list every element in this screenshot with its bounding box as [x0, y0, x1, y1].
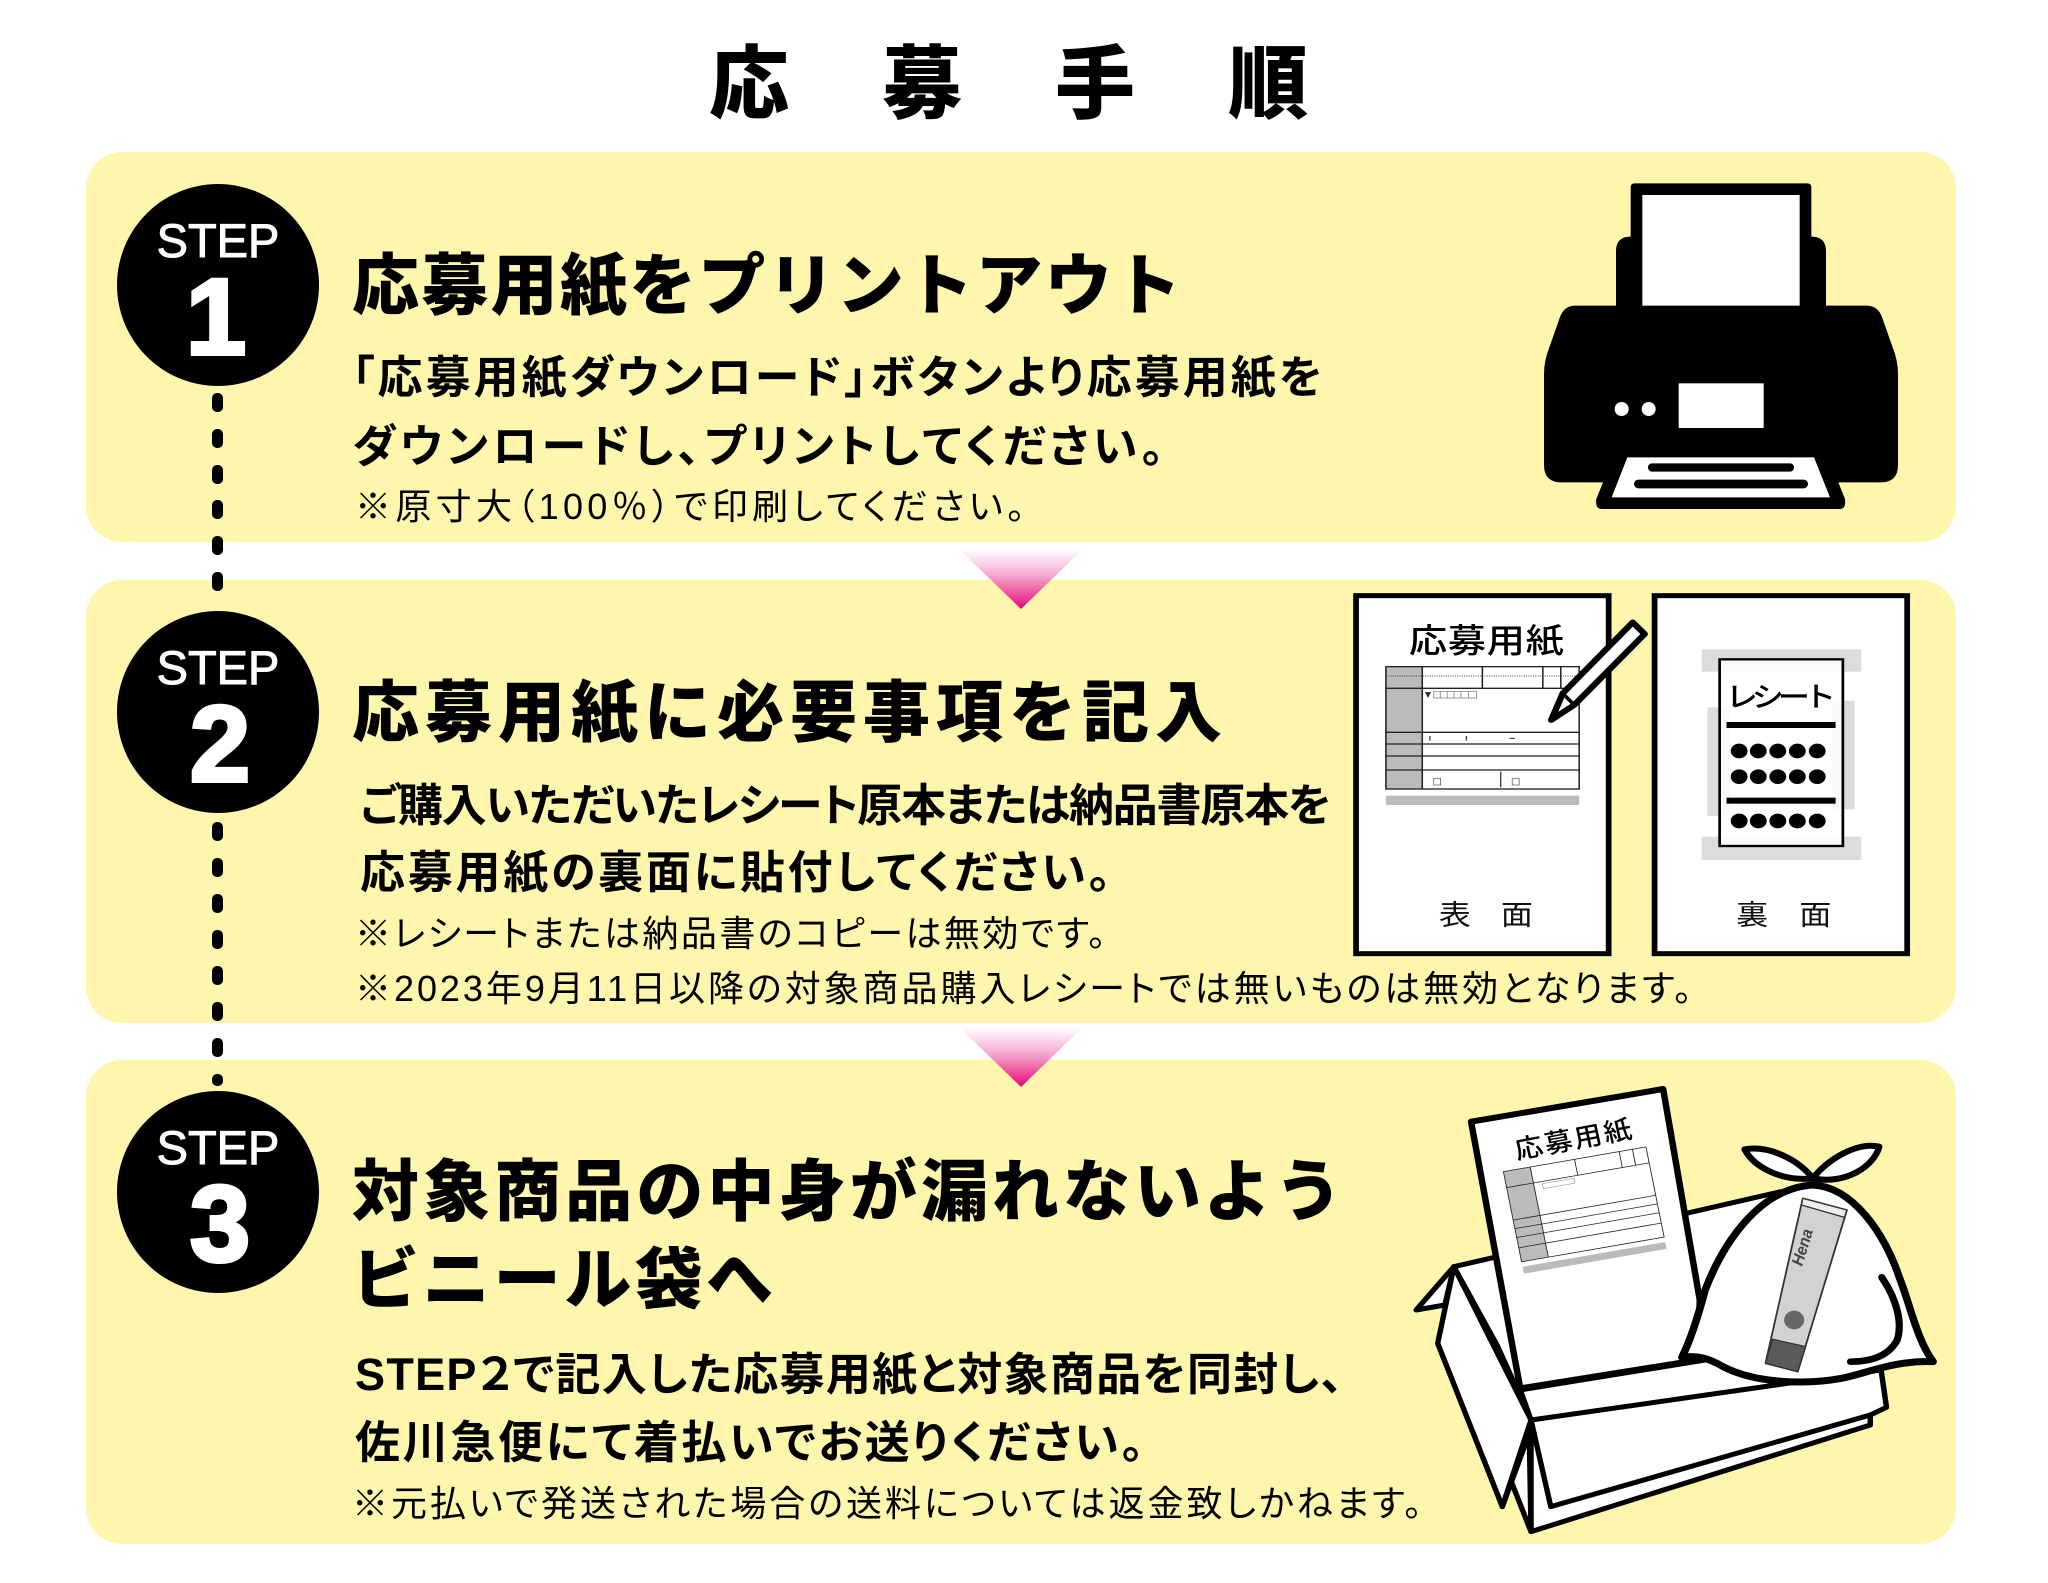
text block: step 3 instructions: 佐川急便にて着払いでお送りください。: [355, 1417, 1144, 1468]
box: front face: [1520, 1360, 1886, 1532]
notes: step 2: [355, 913, 1692, 1009]
arrow: step 2 to step 3: [958, 1026, 1084, 1087]
text block: step 1 instructions: ダウンロードし、プリントしてください。: [352, 421, 1164, 472]
title: 応募手順: [709, 40, 1401, 129]
heading: step 3: [352, 1155, 1342, 1318]
illustration: application form front: 面: [1501, 900, 1533, 931]
heading: step 2: 応募用紙に必要事項を記入: [352, 676, 1222, 751]
panel: step 2 background: [86, 580, 1956, 1023]
illustration: application form back with receipt: [1655, 596, 1907, 954]
icon: printer: [1544, 183, 1898, 509]
product tube: Hena: [1789, 1227, 1817, 1268]
plastic bag: [1682, 1146, 1933, 1382]
dotted connector: step 1 to step 2: [212, 393, 223, 591]
text block: step 3 instructions: STEP２で記入した応募用紙と対象商品を同封し、: [355, 1349, 1343, 1400]
text block: step 2 instructions: 応募用紙の裏面に貼付してください。: [360, 847, 1111, 898]
box: back and interior: [1454, 1192, 1886, 1420]
form sheet: 応募用紙: [1512, 1115, 1634, 1165]
panel: step 1 background: [86, 152, 1956, 542]
dotted connector: step 2 to step 3: [212, 822, 223, 1086]
arrow: step 1 to step 2: [958, 548, 1084, 609]
text block: step 1 instructions: [352, 352, 1322, 472]
badge: step 3: 3: [190, 1163, 250, 1284]
illustration: application form front: [1356, 596, 1609, 954]
badge: step 1: 1: [186, 256, 246, 377]
note: step 1: ※原寸大（100％）で印刷してください。: [355, 486, 1025, 527]
heading: step 3: 対象商品の中身が漏れないよう: [352, 1155, 1342, 1230]
badge: step 2: [117, 611, 319, 813]
heading: step 3: ビニール袋へ: [352, 1243, 773, 1318]
text block: step 3 instructions: [355, 1349, 1343, 1468]
product tube: [1765, 1198, 1847, 1372]
form sheet: [1471, 1089, 1700, 1388]
text block: step 1 instructions: 「応募用紙ダウンロード」ボタンより応募用紙を: [352, 352, 1322, 403]
note: step 3: ※元払いで発送された場合の送料については返金致しかねます。: [352, 1483, 1422, 1524]
text block: step 2 instructions: [360, 780, 1331, 898]
box: left flaps: [1416, 1267, 1531, 1532]
illustration: application form back with receipt: レシート: [1726, 682, 1836, 713]
illustration: box with form and bagged product: [1416, 1089, 1933, 1532]
notes: step 2: ※2023年9月11日以降の対象商品購入レシートでは無いものは無効となります。: [355, 968, 1692, 1009]
badge: step 2: STEP: [157, 641, 279, 694]
illustration: application form back with receipt: 裏: [1736, 899, 1768, 931]
badge: step 3: STEP: [157, 1121, 279, 1174]
badge: step 2: 2: [190, 683, 250, 804]
illustration: application form front: 表: [1439, 899, 1471, 931]
heading: step 1: 応募用紙をプリントアウト: [352, 249, 1181, 324]
badge: step 3: [117, 1091, 319, 1293]
notes: step 2: ※レシートまたは納品書のコピーは無効です。: [355, 913, 1106, 954]
illustration: application form back with receipt: 面: [1799, 900, 1831, 931]
panel: step 3 background: [86, 1060, 1956, 1544]
badge: step 1: STEP: [157, 214, 279, 267]
icon: pen: [1551, 622, 1645, 720]
text block: step 2 instructions: ご購入いただいたレシート原本または納品書原本を: [360, 780, 1331, 831]
badge: step 1: [117, 184, 319, 386]
illustration: application form front: 応募用紙: [1409, 623, 1564, 660]
